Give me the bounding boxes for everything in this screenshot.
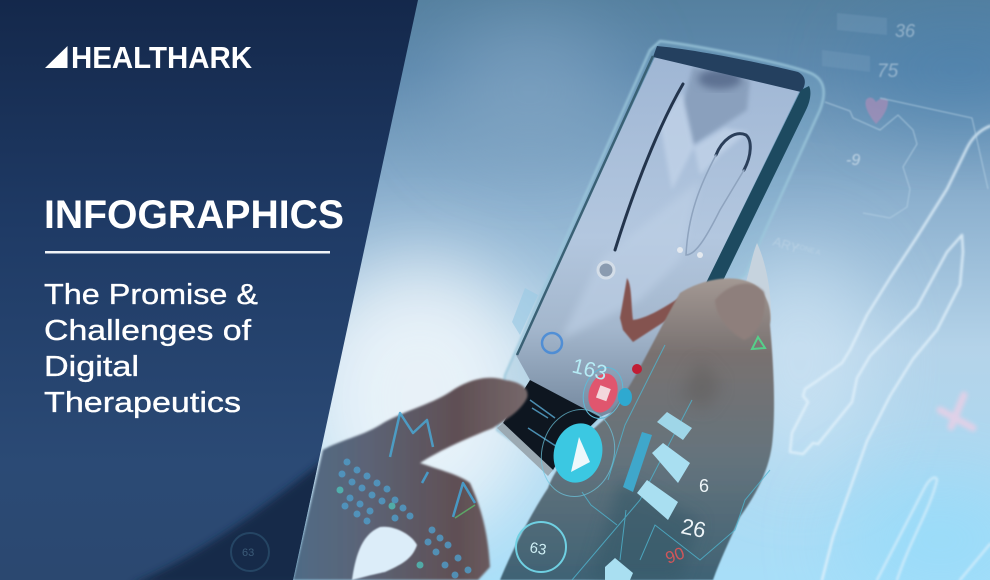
control tile bottom (605, 558, 633, 580)
logo triangle (45, 46, 68, 68)
top bezel (653, 46, 805, 92)
summary text (771, 234, 821, 257)
left bezel (517, 56, 653, 355)
label tile (657, 412, 692, 440)
doctor collar (660, 92, 748, 190)
logo wordmark: HEALTHARK (71, 41, 252, 75)
heart icon (865, 98, 888, 124)
small play dot (618, 388, 632, 406)
faint gauge on panel: 63 (242, 547, 254, 559)
dark lower hand shading (590, 480, 700, 580)
heading rule (45, 251, 330, 254)
readout 36: 36 (895, 21, 916, 41)
heading: INFOGRAPHICS (44, 193, 344, 237)
hand shadow on panel (136, 460, 319, 580)
hud lines (572, 345, 770, 580)
control tile top (652, 443, 690, 483)
subtitle: The Promise & (44, 279, 258, 311)
doctor neck (683, 67, 750, 145)
screen controls dark wedge (503, 380, 600, 470)
small red dot (632, 364, 642, 374)
logo (45, 41, 252, 75)
side button glow (512, 288, 538, 335)
gauge 63: 63 (528, 539, 548, 559)
subtitle: Digital (44, 351, 139, 383)
arm outline graphic (790, 126, 990, 580)
green triangle icon (752, 337, 765, 349)
gauge 63 (516, 522, 566, 572)
summary text: ARY (771, 234, 801, 256)
subtitle: Therapeutics (44, 387, 241, 419)
phone bottom metal edge (497, 423, 553, 476)
subtitle: Challenges of (44, 315, 252, 347)
screen with doctor (516, 57, 800, 417)
medical HUD elements (771, 13, 988, 257)
phone glass frame (497, 41, 824, 470)
holding hand (500, 243, 774, 580)
faint gauge on panel (231, 533, 269, 571)
reading 26: 26 (679, 513, 708, 543)
readout 75: 75 (877, 61, 899, 82)
summary text: ZONE A (794, 243, 821, 257)
control tile middle (637, 480, 678, 520)
reading 6: 6 (699, 476, 709, 496)
red reading: 90 (663, 543, 687, 568)
thumb nail (715, 284, 765, 340)
play button (532, 401, 624, 505)
right bezel (705, 86, 810, 295)
hand UI overlays (336, 337, 770, 580)
doctor coat shading (560, 180, 700, 340)
chart waveform on fingers (390, 413, 475, 518)
knuckle shadow (680, 360, 722, 410)
left navy panel (0, 0, 418, 580)
stethoscope (598, 84, 750, 278)
slider bar (623, 432, 652, 492)
red record button (577, 362, 629, 424)
doctor hand (620, 278, 687, 342)
HUD lines (825, 98, 988, 218)
index finger and lower fingers (293, 378, 528, 580)
HUD tiles (795, 13, 887, 162)
phone (497, 41, 824, 476)
subtitle (44, 279, 258, 419)
dot matrix on fingers (336, 458, 472, 578)
gap between fingers (352, 527, 417, 580)
person icon ring (542, 333, 562, 353)
doctor chin shadow (698, 69, 742, 89)
reading 163: 163 (570, 355, 609, 385)
bottom screen text lines (528, 400, 565, 452)
readout -9: -9 (846, 152, 860, 169)
pink cross icon (940, 395, 973, 428)
